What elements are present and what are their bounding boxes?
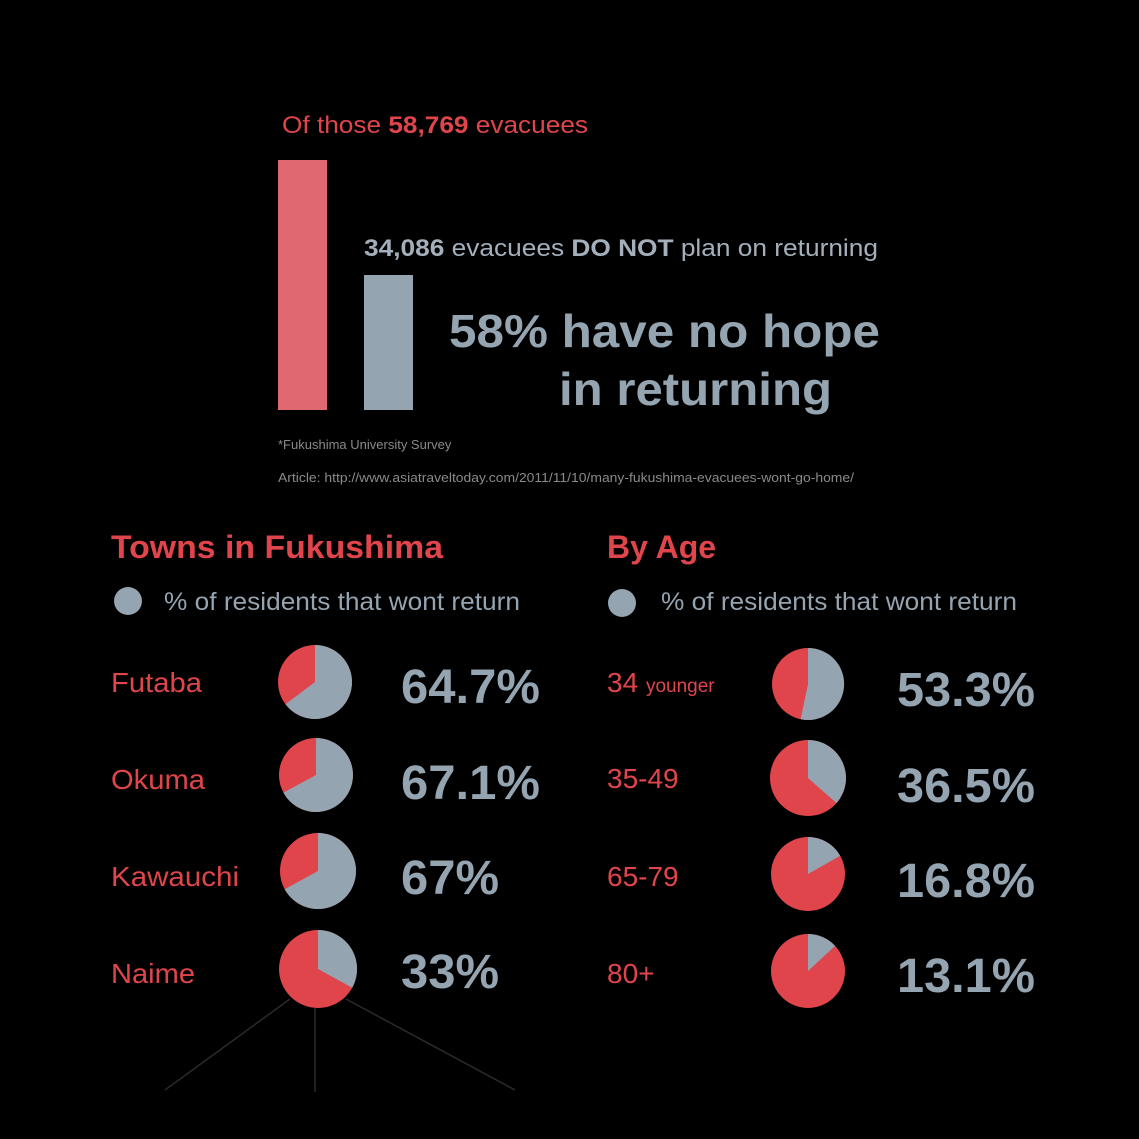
footnote: article: Article: http://www.asiatraveltoday.com/2011/11/10/many-fukushima-evacuees-wont-go-home/ — [278, 470, 854, 485]
values: age: 13.1% — [897, 950, 1035, 1003]
bar: not returning — [364, 275, 413, 410]
labels: age — [607, 667, 715, 989]
labels: towns: Naime — [111, 958, 195, 989]
pie: 34 younger — [772, 648, 844, 720]
pie: Kawauchi — [280, 833, 356, 909]
pie: 35-49 — [770, 740, 846, 816]
values: towns: 67% — [401, 852, 499, 905]
labels: towns: Kawauchi — [111, 861, 239, 892]
pie: Okuma — [279, 738, 353, 812]
bar: total evacuees — [278, 160, 327, 410]
legend: age: % of residents that wont return — [661, 588, 1017, 616]
labels: age: 34 younger — [607, 667, 715, 698]
panel: towns — [111, 529, 540, 1092]
labels: towns — [111, 667, 239, 989]
values: age: 53.3% — [897, 664, 1035, 717]
panel: by age — [607, 529, 1035, 1008]
title: of those evacuees: Of those 58,769 evacuees — [282, 112, 588, 139]
lines below Naime pie — [165, 999, 515, 1092]
labels: towns: Futaba — [111, 667, 202, 698]
legend: towns: % of residents that wont return — [164, 588, 520, 616]
footnote: source: *Fukushima University Survey — [278, 437, 452, 452]
labels: age: 65-79 — [607, 861, 679, 892]
pie: Futaba — [278, 645, 352, 719]
text: not returning count: 34,086 evacuees DO NOT plan on returning — [364, 235, 878, 262]
labels: age: 80+ — [607, 958, 654, 989]
pie: Naime — [279, 930, 357, 1008]
pie: 65-79 — [771, 837, 845, 911]
headline: 58%: 58% have no hope — [449, 305, 880, 357]
headline: 58% — [449, 305, 880, 415]
values: age — [897, 664, 1035, 1003]
labels: towns: Okuma — [111, 764, 205, 795]
values: towns: 64.7% — [401, 661, 540, 714]
labels: age: 35-49 — [607, 763, 679, 794]
values: age: 36.5% — [897, 760, 1035, 813]
heading: towns: Towns in Fukushima — [111, 529, 443, 565]
values: towns — [401, 661, 540, 999]
values: age: 16.8% — [897, 855, 1035, 908]
headline: 58%: in returning — [559, 363, 832, 415]
values: towns: 67.1% — [401, 757, 540, 810]
values: towns: 33% — [401, 946, 499, 999]
heading: by age: By Age — [607, 529, 716, 565]
pie: 80+ — [771, 934, 845, 1008]
